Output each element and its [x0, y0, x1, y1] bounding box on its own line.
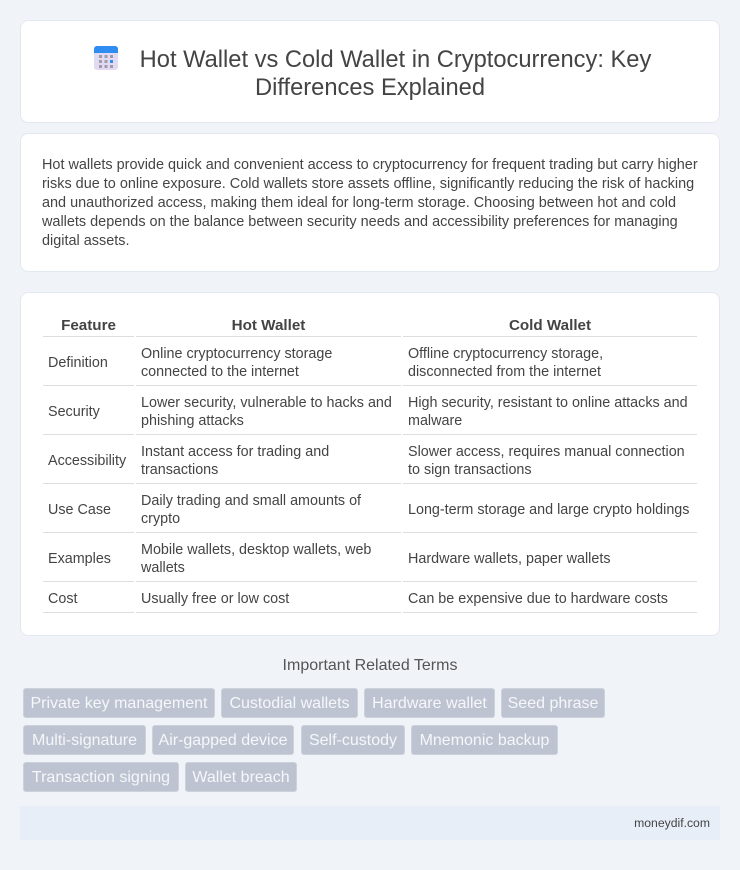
- tags: Transaction signing: [32, 769, 170, 786]
- intro text: digital assets.: [42, 233, 129, 249]
- table: Mobile wallets, desktop wallets, web: [141, 542, 371, 558]
- table: Online cryptocurrency storage: [141, 346, 332, 362]
- footer bar: [20, 806, 720, 840]
- tags: Custodial wallets: [229, 695, 350, 712]
- intro text: wallets depends on the balance between security needs and accessibility preferences for managing: [42, 214, 678, 230]
- icon: calendar: [94, 46, 118, 70]
- row: accessibility: Accessibility: [48, 453, 126, 469]
- table: Usually free or low cost: [141, 591, 289, 607]
- table: [43, 317, 697, 613]
- table: Cold Wallet: [509, 317, 591, 334]
- tags: Seed phrase: [508, 695, 598, 712]
- row: security: Security: [48, 404, 100, 420]
- table: Daily trading and small amounts of: [141, 493, 361, 509]
- header row: Feature: [61, 317, 116, 334]
- table: Hardware wallets, paper wallets: [408, 551, 610, 567]
- title: Hot Wallet vs Cold Wallet in Cryptocurrency: Key: [140, 47, 651, 73]
- table: High security, resistant to online attacks and: [408, 395, 688, 411]
- table: wallets: [141, 560, 185, 576]
- row: examples: Examples: [48, 551, 111, 567]
- footer credit: moneydif.com: [634, 816, 710, 830]
- tags: Self-custody: [309, 732, 397, 749]
- table: Slower access, requires manual connection: [408, 444, 685, 460]
- title line 2: Differences Explained: [255, 75, 485, 101]
- table: connected to the internet: [141, 364, 299, 380]
- intro text: [42, 157, 698, 249]
- table: Long-term storage and large crypto holdings: [408, 502, 689, 518]
- tags: Private key management: [30, 695, 207, 712]
- intro text: risks due to online exposure. Cold wallets store assets offline, significantly reducing the risk of hacking: [42, 176, 694, 192]
- table: phishing attacks: [141, 413, 244, 429]
- intro panel: [20, 133, 720, 272]
- tags: Multi-signature: [32, 732, 137, 749]
- table: to sign transactions: [408, 462, 532, 478]
- table: malware: [408, 413, 462, 429]
- table: Lower security, vulnerable to hacks and: [141, 395, 392, 411]
- table: disconnected from the internet: [408, 364, 601, 380]
- tags: Mnemonic backup: [420, 732, 549, 749]
- row: cost: Cost: [48, 591, 78, 607]
- table: transactions: [141, 462, 218, 478]
- comparison table panel: [20, 292, 720, 636]
- row: use case: Use Case: [48, 502, 111, 518]
- table: Hot Wallet: [232, 317, 305, 334]
- table: Instant access for trading and: [141, 444, 329, 460]
- header card: [20, 20, 720, 123]
- table: Can be expensive due to hardware costs: [408, 591, 668, 607]
- tags: Air-gapped device: [159, 732, 287, 749]
- intro text: Hot wallets provide quick and convenient access to cryptocurrency for frequent trading but carry higher: [42, 157, 698, 173]
- table: crypto: [141, 511, 180, 527]
- tags: [23, 688, 605, 792]
- tags: Wallet breach: [192, 769, 290, 786]
- row: definition: Definition: [48, 355, 108, 371]
- related terms heading: Important Related Terms: [283, 657, 457, 674]
- tags: Hardware wallet: [372, 695, 487, 712]
- table: Offline cryptocurrency storage,: [408, 346, 603, 362]
- intro text: and unauthorized access, making them ideal for long-term storage. Choosing between hot and cold: [42, 195, 676, 211]
